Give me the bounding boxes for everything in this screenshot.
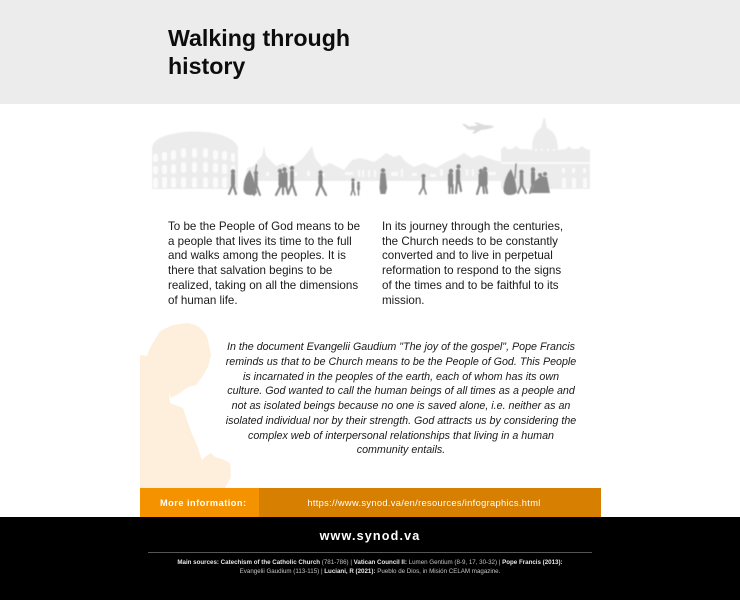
text column right: converted and to live in perpetual bbox=[382, 249, 553, 262]
more information label: More information: bbox=[160, 498, 247, 508]
walker 2 bbox=[316, 170, 326, 195]
text column left bbox=[168, 220, 360, 307]
pair walking bbox=[477, 167, 487, 194]
header band bbox=[0, 0, 740, 104]
italic quote text: reminds us that to be Church means to be the People of God. This People bbox=[226, 356, 576, 368]
website: www.synod.va bbox=[320, 529, 420, 543]
text column left: a people that lives its time to the full bbox=[168, 235, 352, 248]
italic quote text: community entails. bbox=[357, 444, 445, 456]
robed figure bbox=[380, 168, 387, 194]
sources: Main sources: Catechism of the Catholic Church (781-786) | Vatican Council II: Lumen Gentium (8-9, 17, 30-32) | Pope Francis (2013): bbox=[177, 559, 563, 566]
url: https://www.synod.va/en/resources/infographics.html bbox=[307, 498, 541, 508]
title bbox=[168, 25, 350, 79]
illustration: people walking through a skyline bbox=[152, 118, 590, 197]
italic quote text: not as isolated beings because no one is saved alone, i.e. neither as an bbox=[232, 400, 570, 412]
italic quote text: culture. God wanted to call the human beings of all times as a people and bbox=[227, 385, 575, 397]
text column left: of human life. bbox=[168, 294, 238, 307]
text column right: reformation to respond to the signs bbox=[382, 264, 561, 277]
text column left: there that salvation begins to be bbox=[168, 264, 332, 277]
adult and child bbox=[351, 178, 360, 195]
text column left: To be the People of God means to be bbox=[168, 220, 360, 233]
more information label bbox=[140, 488, 259, 517]
italic quote text: complex web of interpersonal relationships that living in a human bbox=[248, 430, 554, 442]
walkers bbox=[229, 164, 550, 195]
more information bar bbox=[140, 488, 601, 517]
text column left: and walks among the peoples. It is bbox=[168, 249, 346, 262]
text column right bbox=[382, 220, 563, 307]
nun and companion bbox=[243, 165, 260, 195]
text column right: of the times and to be faithful to its bbox=[382, 279, 559, 292]
italic quote text bbox=[226, 341, 576, 456]
couple bbox=[449, 164, 461, 193]
sources: Evangelii Gaudium (113-115) | Luciani, R (2021): Pueblo de Dios, in Misión CELAM magazine. bbox=[240, 568, 500, 574]
text column right: the Church needs to be constantly bbox=[382, 235, 558, 248]
nun, pilgrim and seated group bbox=[503, 164, 550, 195]
sources bbox=[177, 559, 563, 574]
italic quote text: is incarnated in the peoples of the earth, each of whom has its own bbox=[243, 370, 559, 382]
title: Walking through bbox=[168, 25, 350, 51]
text column right: In its journey through the centuries, bbox=[382, 220, 563, 233]
italic quote text: In the document Evangelii Gaudium "The joy of the gospel", Pope Francis bbox=[227, 341, 575, 353]
footer bbox=[0, 517, 740, 600]
praying figure silhouette bbox=[140, 323, 231, 488]
airplane bbox=[462, 122, 494, 134]
St Peter's basilica bbox=[501, 118, 590, 189]
child walking bbox=[420, 174, 426, 194]
group of three bbox=[276, 166, 296, 195]
text column left: realized, taking on all the dimensions bbox=[168, 279, 358, 292]
italic quote text: isolated individual nor by their strength. God attracts us by considering the bbox=[226, 415, 576, 427]
town skyline bbox=[247, 146, 501, 181]
colosseum bbox=[152, 132, 238, 189]
text column right: mission. bbox=[382, 294, 425, 307]
walker 1 bbox=[229, 169, 236, 194]
title: history bbox=[168, 53, 245, 79]
